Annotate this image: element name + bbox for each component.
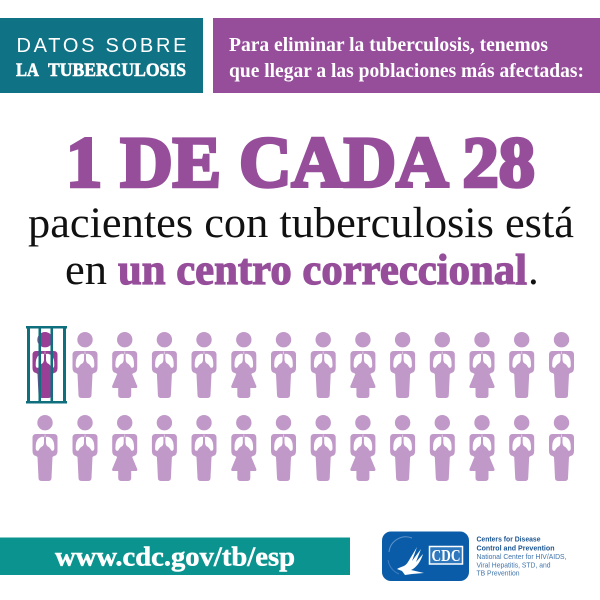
- icon: hhs eagle: [388, 537, 424, 575]
- headline statistic: 1 DE CADA 28: [66, 122, 535, 202]
- text: en un centro correccional: .: [528, 247, 539, 294]
- panel: datos sobre la tuberculosis: [0, 18, 203, 93]
- logo: CDC: [382, 532, 469, 581]
- text: cdc organization: Viral Hepatitis, STD, and: [476, 560, 550, 570]
- heading: la tuberculosis: TUBERCULOSIS: [48, 60, 186, 81]
- text: en un centro correccional: un centro correccional: [118, 247, 527, 294]
- text: en un centro correccional: en: [65, 247, 107, 294]
- text: cdc organization: Centers for Disease: [476, 534, 540, 544]
- pictogram: 28 patients: [26, 326, 574, 481]
- icon: cdc box: CDC: [432, 546, 460, 565]
- text: pacientes con tuberculosis está: pacientes con tuberculosis está: [28, 200, 574, 247]
- text: cdc organization: National Center for HIV/AIDS,: [476, 552, 566, 561]
- panel: website url: [0, 538, 350, 575]
- patients row 1: [72, 332, 574, 398]
- panel: intro message: [213, 18, 600, 93]
- text: cdc organization: Control and Prevention: [476, 544, 555, 552]
- heading: la tuberculosis: LA: [16, 60, 39, 81]
- patients row 2: [32, 415, 574, 481]
- text: cdc organization: TB Prevention: [476, 569, 520, 578]
- text: intro line 2: que llegar a las poblaciones más afectadas:: [229, 61, 584, 82]
- text: cdc organization: [476, 534, 566, 578]
- text: intro line 1: Para eliminar la tuberculosis, tenemos: [229, 35, 548, 56]
- text: url: www.cdc.gov/tb/esp: [55, 542, 295, 572]
- heading: datos sobre: DATOS SOBRE: [16, 35, 186, 57]
- icon: incarcerated patient: [26, 326, 67, 404]
